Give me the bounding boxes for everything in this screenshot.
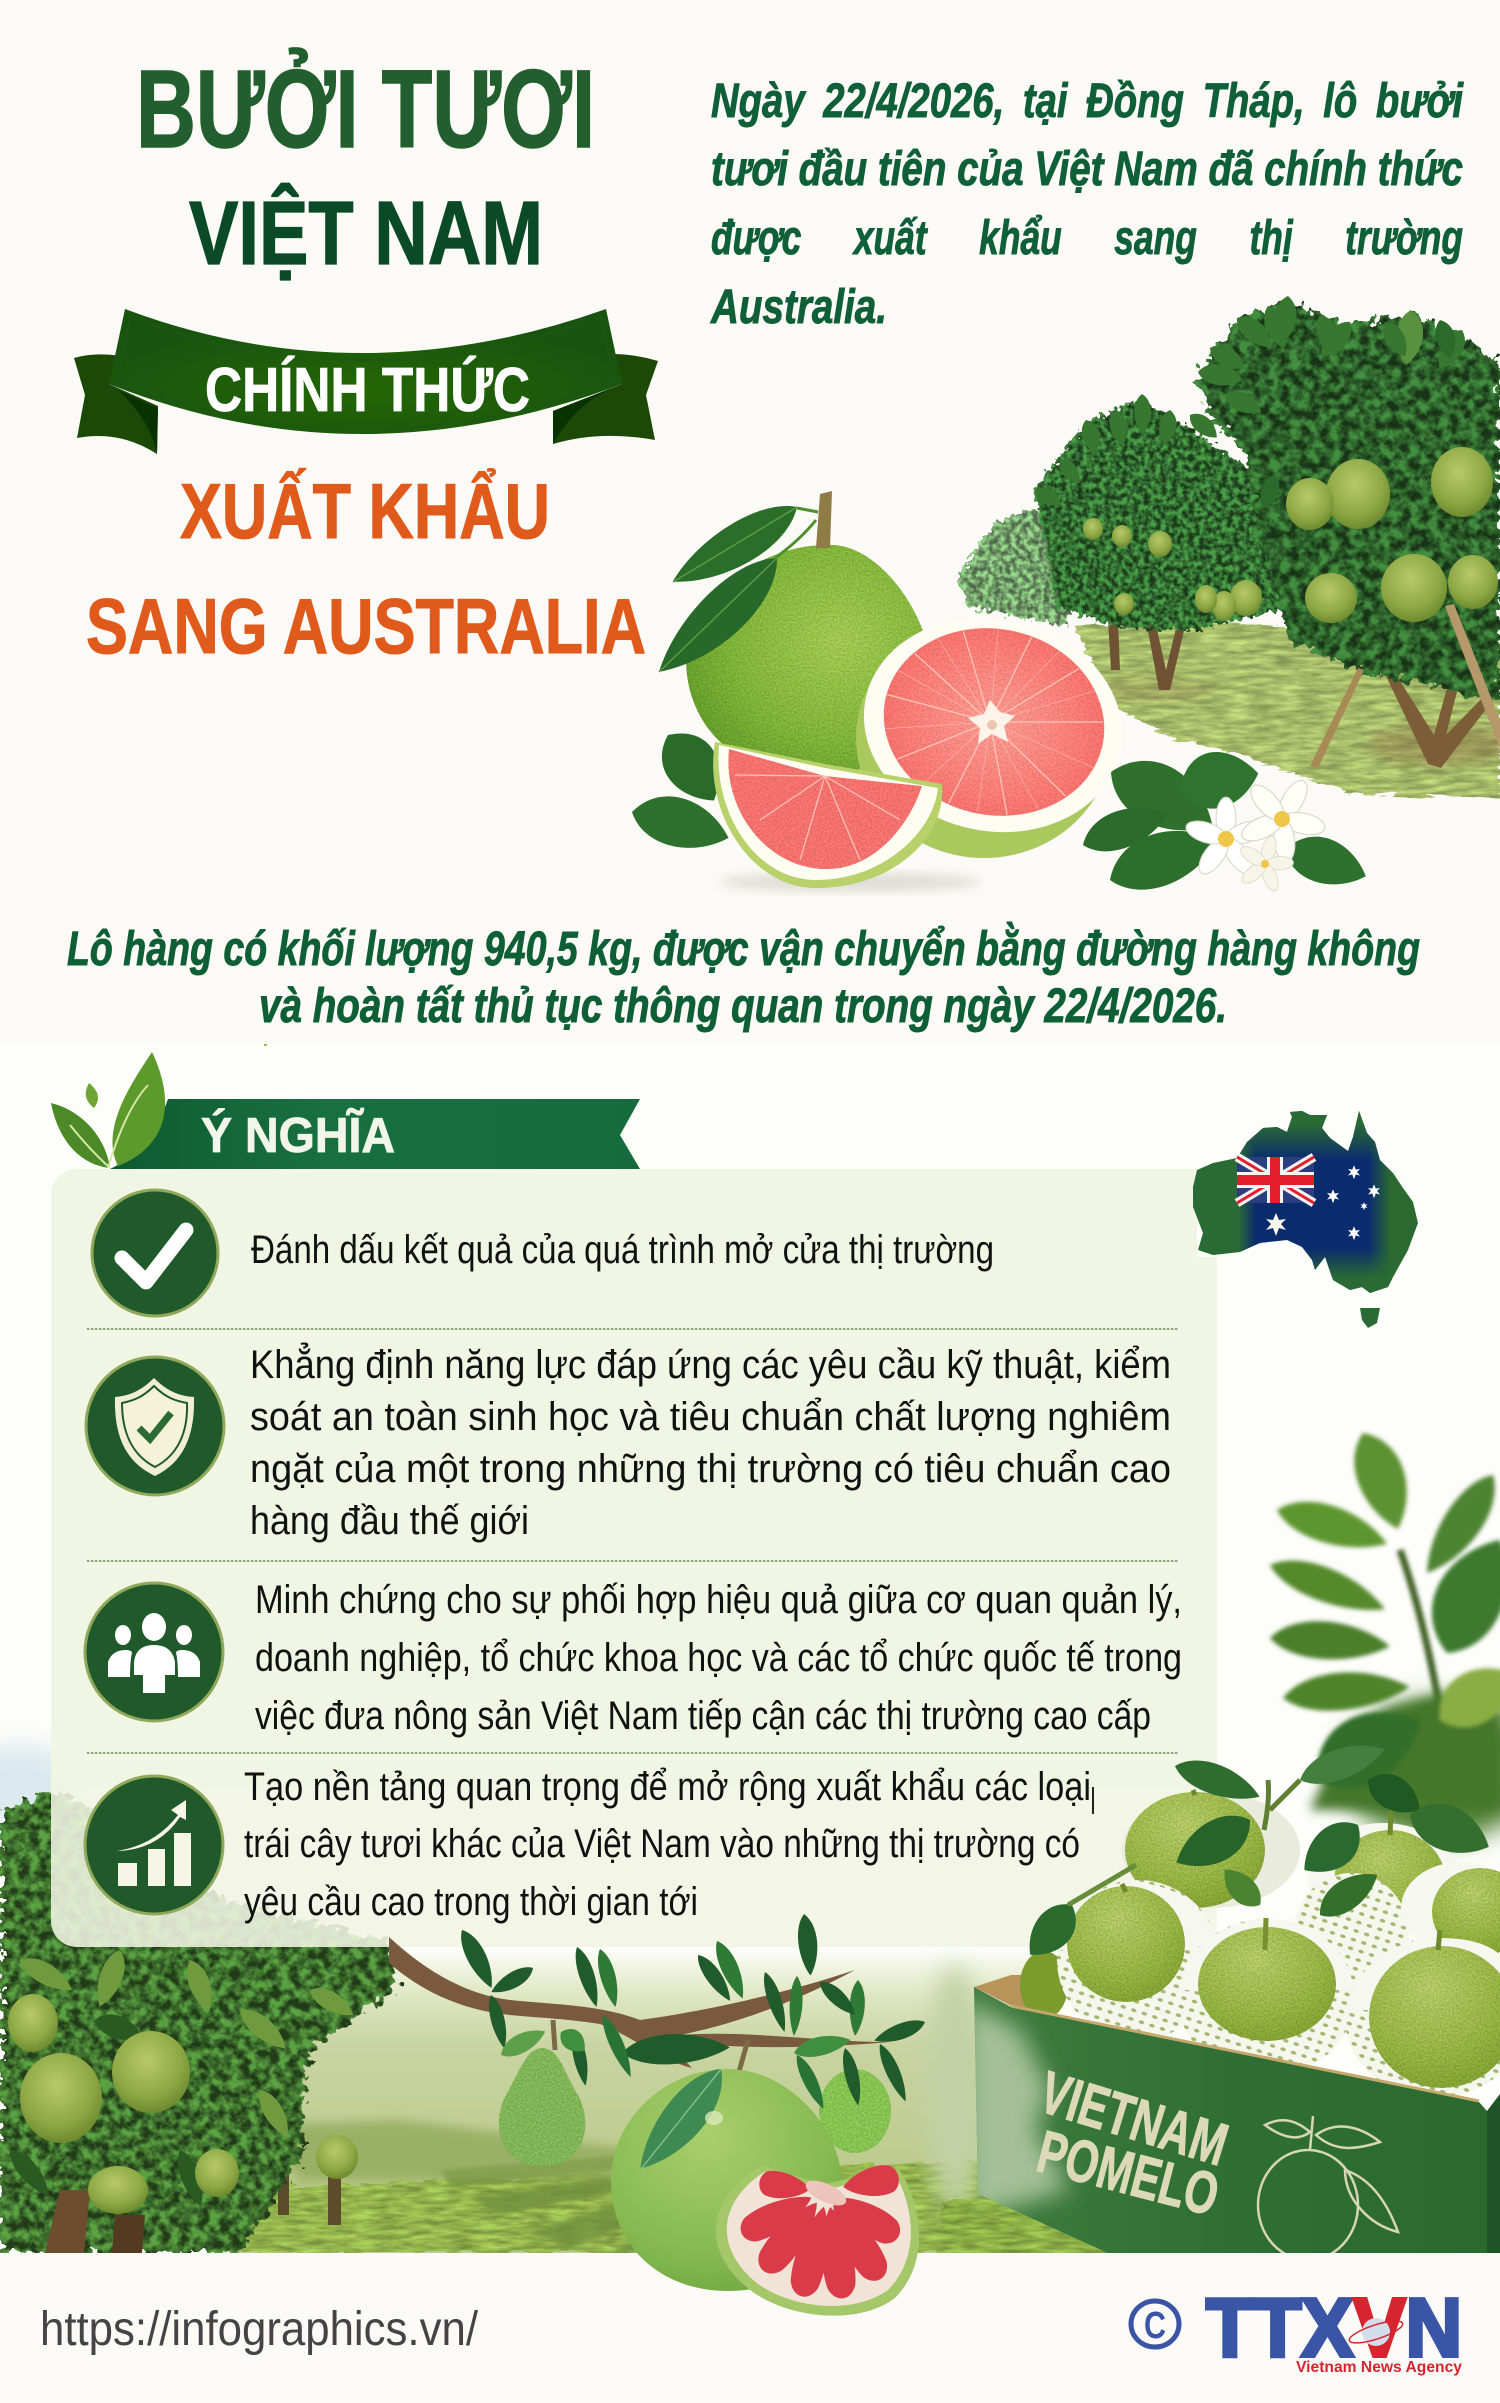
intro paragraph: Australia. [710, 281, 887, 334]
list text 2: Khẳng định năng lực đáp ứng các yêu cầu kỹ thuật, kiểm [250, 1341, 1171, 1387]
box print: Vietnam Pomelo: VIETNAM [1032, 2058, 1235, 2179]
section banner: Ý nghĩa [110, 1099, 640, 1169]
box print: Vietnam Pomelo [1036, 2070, 1230, 2214]
shipment note: và hoàn tất thủ tục thông quan trong ngày 22/4/2026. [259, 980, 1227, 1033]
panel: significance list [51, 1169, 1217, 1947]
list text 2: ngặt của một trong những thị trường có tiêu chuẩn cao [250, 1447, 1171, 1491]
heading: Xuất khẩu: XUẤT KHẨU [180, 467, 550, 555]
divider lines [87, 1329, 1179, 1753]
list text 4: yêu cầu cao trong thời gian tới [244, 1880, 698, 1924]
heading: Sang Australia: SANG AUSTRALIA [86, 582, 646, 670]
illustration: whole pomelo with stem and leaves [626, 491, 980, 892]
list text 3: Minh chứng cho sự phối hợp hiệu quả giữa cơ quan quản lý, [255, 1578, 1182, 1622]
list text 4: trái cây tươi khác của Việt Nam vào những thị trường có [244, 1822, 1080, 1866]
ribbon: Chính thức: CHÍNH THỨC [205, 356, 530, 425]
icon: people [85, 1583, 223, 1721]
background scene: orchard [0, 1745, 1030, 2255]
illustration: pomelo orchard [957, 294, 1500, 798]
illustration: cut pomelo half [856, 618, 1119, 858]
list text 3: việc đưa nông sản Việt Nam tiếp cận các thị trường cao cấp [255, 1694, 1151, 1738]
panel cut-out behind map [1197, 1160, 1227, 1257]
list text 4 [244, 1765, 1091, 1924]
logo: copyright mark [1131, 2301, 1179, 2347]
title: Việt Nam: VIỆT NAM [189, 182, 543, 284]
illustration: pomelo gift box [927, 1734, 1500, 2260]
small mark [264, 1044, 267, 1046]
illustration: cut pomelo with red segments [716, 2163, 919, 2316]
list text 3: doanh nghiệp, tổ chức khoa học và các tổ chức quốc tế trong [255, 1636, 1182, 1680]
lower section background [0, 1044, 1500, 2253]
list text 3 [255, 1578, 1182, 1738]
illustration: pomelo wedge [713, 742, 942, 888]
illustration: blurred foliage [1264, 1424, 1500, 1840]
illustration: flowers and leaves [1076, 743, 1373, 903]
list text 1: Đánh dấu kết quả của quá trình mở cửa thị trường [251, 1228, 994, 1272]
title: Bưởi tươi: BƯỞI TƯƠI [136, 48, 595, 171]
logo: TTXVN: Vietnam News Agency [1296, 2359, 1462, 2376]
list text 2: hàng đầu thế giới [250, 1499, 529, 1543]
box print: Vietnam Pomelo: POMELO [1031, 2118, 1226, 2229]
list text 2: soát an toàn sinh học và tiêu chuẩn chất lượng nghiêm [250, 1395, 1171, 1439]
ribbon: Chính thức [74, 309, 658, 454]
icon: growth chart [85, 1776, 223, 1914]
box print: pomelo outline [1258, 2116, 1398, 2260]
logo: copyright mark: C [1144, 2305, 1166, 2347]
icon: leaves [51, 1052, 165, 1168]
illustration: branch with pomelos [389, 1913, 928, 2291]
list text 2 [250, 1341, 1171, 1543]
shipment note [67, 921, 1420, 1033]
icon: checkmark [92, 1190, 218, 1316]
map: Australia with flag [1193, 1111, 1418, 1328]
footer background [0, 2253, 1500, 2403]
list text 4: Tạo nền tảng quan trọng để mở rộng xuất khẩu các loại [244, 1765, 1091, 1809]
source URL: https://infographics.vn/ [40, 2303, 479, 2356]
intro paragraph [710, 75, 1464, 334]
logo: TTXVN: TTXVN [1206, 2281, 1462, 2374]
icon: shield [86, 1357, 224, 1495]
stray cursor mark [1092, 1787, 1094, 1814]
section banner: Ý nghĩa: Ý NGHĨA [201, 1109, 395, 1163]
